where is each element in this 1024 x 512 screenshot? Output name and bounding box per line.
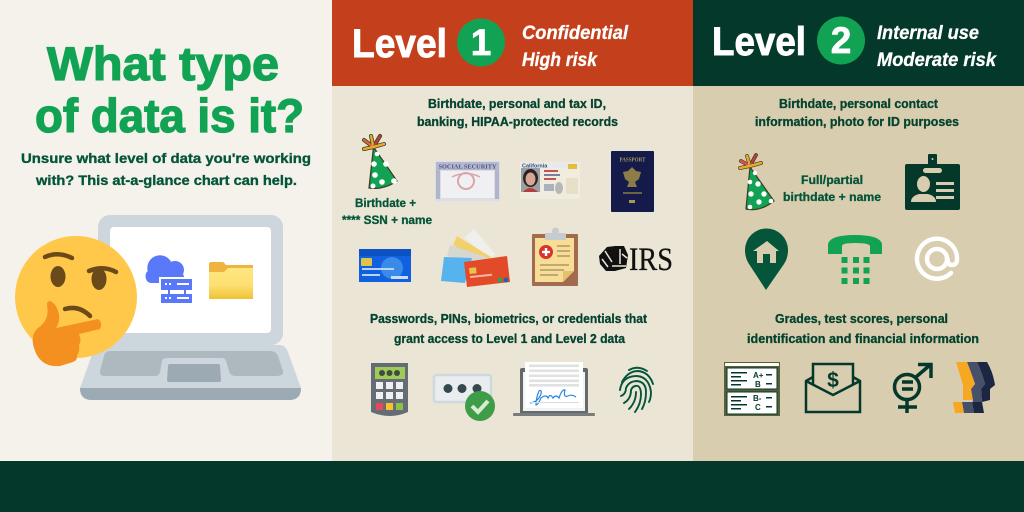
icon: driver license — [520, 162, 580, 199]
icon: fanned credit cards — [441, 229, 510, 287]
label: full or partial birthdate — [783, 173, 881, 204]
icon: envelope with dollar — [806, 364, 860, 412]
icon: social security card — [435, 161, 500, 201]
icon: cloud and server — [146, 255, 194, 305]
icon: IRS logo: IRS — [629, 242, 673, 278]
icon: driver license: California — [522, 164, 548, 170]
icon: profile silhouettes — [953, 362, 995, 413]
icon: IRS logo — [599, 242, 673, 278]
icon: grade report: B — [755, 380, 761, 389]
level 2 grades text: identification and financial information — [747, 331, 979, 346]
panel header: level 2: Level — [712, 20, 806, 64]
icon: fingerprint — [620, 368, 653, 412]
level 2 grades text — [747, 311, 979, 346]
panel header: level 1: Level — [352, 22, 447, 66]
icon: medical clipboard — [532, 228, 578, 286]
panel: intro background — [0, 0, 332, 461]
icon: grade report: B- — [753, 394, 762, 403]
label: birthdate and SSN: Birthdate + — [355, 196, 416, 210]
icon: home location pin — [745, 228, 788, 290]
intro text: with? This at-a-glance chart can help. — [35, 172, 297, 188]
label: birthdate and SSN: **** SSN + name — [342, 213, 432, 227]
level 2 description: Birthdate, personal contact — [779, 96, 939, 111]
icon: grade report: A+ — [753, 371, 764, 380]
panel header: level 2: Internal use — [877, 23, 979, 44]
icon: grade report — [724, 362, 780, 416]
level 1 credentials text: Passwords, PINs, biometrics, or credentials that — [370, 311, 648, 326]
icon: folder — [209, 262, 253, 299]
icon: envelope with dollar: $ — [827, 369, 839, 392]
panel header: level 2: 2 — [831, 20, 851, 61]
footer band — [0, 461, 1024, 512]
panel header: level 2: Moderate risk — [877, 50, 997, 71]
panel header: level 1: Confidential — [522, 23, 629, 44]
panel header: level 2 — [693, 0, 1024, 86]
panel: level 1 background — [332, 86, 693, 461]
panel: level 2 background — [693, 86, 1024, 461]
level 1 description: banking, HIPAA-protected records — [417, 114, 618, 129]
icon: at sign — [917, 239, 957, 279]
panel header: level 1: High risk — [522, 50, 598, 71]
icon: signed document on laptop — [513, 362, 595, 416]
panel header: level 1 — [332, 0, 693, 86]
icon: party hat — [364, 136, 397, 188]
icon: telephone — [828, 235, 882, 284]
icon: bank card — [359, 249, 411, 282]
icon: grade report: C — [755, 403, 761, 412]
level 1 description: Birthdate, personal and tax ID, — [428, 96, 606, 111]
icon: laptop — [80, 215, 301, 400]
panel header: level 1: 1 — [471, 22, 491, 63]
label: birthdate and SSN — [342, 196, 432, 227]
level 2 description: information, photo for ID purposes — [755, 114, 959, 129]
title: of data is it? — [35, 89, 304, 142]
level 1 credentials text — [370, 311, 648, 346]
icon: passport — [611, 151, 654, 212]
icon: ID badge — [905, 154, 960, 210]
icon: PIN keypad — [371, 363, 408, 416]
icon: social security card: SOCIAL SECURITY — [438, 164, 497, 170]
icon: thinking emoji — [15, 236, 137, 366]
label: full or partial birthdate: birthdate + name — [783, 190, 881, 204]
icon: password check — [434, 375, 495, 421]
icon: passport: PASSPORT — [620, 156, 646, 164]
icon: party hat level 2 — [740, 155, 774, 210]
title: What type — [47, 37, 279, 90]
level 2 grades text: Grades, test scores, personal — [775, 311, 948, 326]
label: full or partial birthdate: Full/partial — [801, 173, 863, 187]
icon: gender equality symbol — [894, 364, 931, 413]
intro text: Unsure what level of data you're working — [21, 150, 311, 166]
level 2 description — [755, 96, 959, 129]
intro text — [21, 150, 311, 188]
level 1 credentials text: grant access to Level 1 and Level 2 data — [394, 331, 626, 346]
title — [35, 37, 304, 142]
level 1 description — [417, 96, 618, 129]
